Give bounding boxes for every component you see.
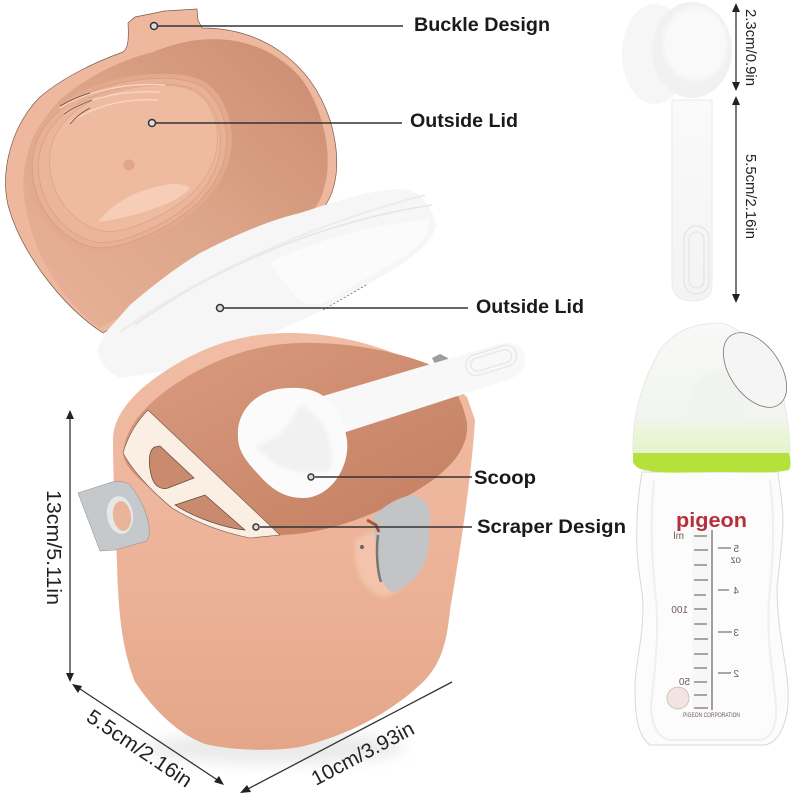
leader: Outside Lid lower: Outside Lid	[476, 297, 584, 318]
dimension: scoop bowl	[732, 3, 759, 91]
scale marks: PIGEON CORPORATION	[683, 713, 740, 719]
nipple and teat	[633, 321, 800, 453]
green collar	[633, 453, 790, 473]
leader: Outside Lid lower	[216, 297, 584, 318]
leader: Scoop: Scoop	[474, 468, 536, 489]
recycling stamp	[667, 687, 689, 709]
leader: Outside Lid upper	[148, 111, 518, 132]
scale marks: 4	[733, 586, 739, 597]
grey rear tag of jar	[432, 354, 448, 366]
scale marks: ml	[673, 531, 684, 542]
scale marks	[671, 530, 741, 719]
dimension: scoop bowl: 2.3cm/0.9in	[742, 9, 759, 86]
dimension: scoop handle: 5.5cm/2.16in	[742, 154, 759, 239]
dimension: scoop handle	[732, 96, 759, 303]
measuring scoop in canister	[238, 343, 525, 498]
dimension: width	[240, 682, 452, 793]
scale marks: oz	[730, 555, 741, 566]
white inner lid	[98, 189, 436, 378]
scale marks: 50	[678, 677, 690, 688]
standalone scoop	[622, 2, 732, 301]
dimension: height	[42, 410, 74, 682]
left grey hinge tag	[78, 482, 149, 551]
leader: Buckle Design	[150, 15, 550, 36]
lid inner raised oval	[27, 74, 232, 252]
leader: Scoop	[308, 468, 536, 489]
canister body	[113, 333, 475, 764]
scale marks: 3	[733, 628, 739, 639]
dimension: width: 10cm/3.93in	[308, 717, 418, 790]
leader: Outside Lid upper: Outside Lid	[410, 111, 518, 132]
dimension: depth	[72, 684, 224, 792]
baby bottle	[633, 321, 800, 745]
scraper	[123, 410, 280, 538]
canister interior	[123, 343, 467, 535]
leader: Scraper Design	[253, 517, 626, 538]
scale marks: 2	[733, 669, 739, 680]
leader: Buckle Design: Buckle Design	[414, 15, 550, 36]
leader: Scraper Design: Scraper Design	[477, 517, 626, 538]
scale marks: 5	[733, 544, 739, 555]
dimension: height: 13cm/5.11in	[42, 490, 65, 605]
right grey latch button	[355, 495, 430, 597]
pigeon logo: pigeon	[676, 510, 747, 532]
dimension: depth: 5.5cm/2.16in	[82, 705, 196, 792]
glass body	[635, 472, 788, 745]
outer lid	[6, 9, 337, 333]
scale marks: 100	[671, 605, 688, 616]
